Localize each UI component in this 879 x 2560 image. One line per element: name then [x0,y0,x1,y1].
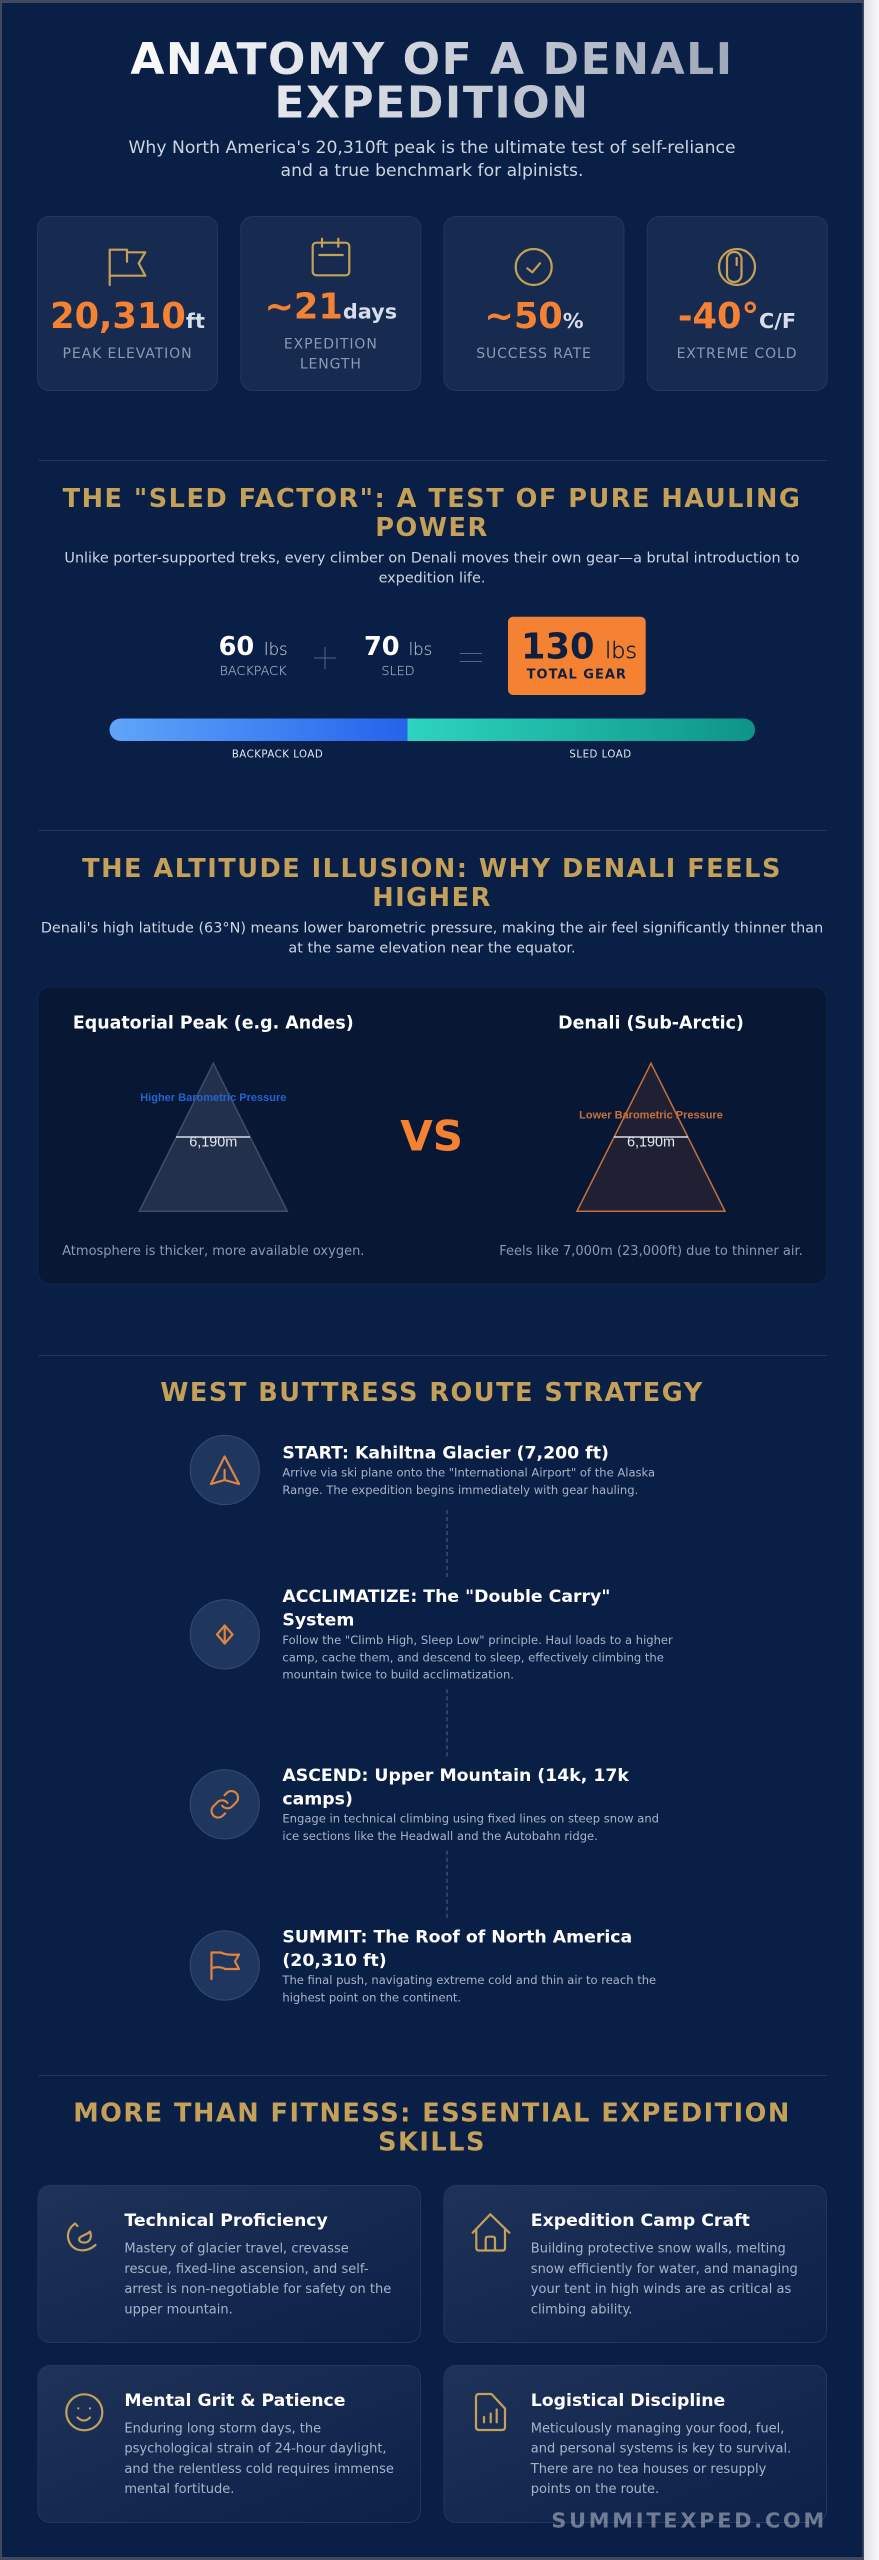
versus label: VS [400,1112,463,1161]
stat card: success rate [444,216,624,390]
subtitle: and a true benchmark for alpinists. [281,161,583,181]
stat card: expedition length: LENGTH [300,356,362,372]
heading: THE "SLED FACTOR": A TEST OF PURE HAULING [63,484,801,514]
step: summit: The final push, navigating extreme cold and thin air to reach the [281,1973,656,1987]
panel: key stats [38,216,827,390]
stat card: peak elevation [38,216,218,390]
skill card: logistical discipline: There are no tea houses or resupply [530,2462,767,2477]
step: ascend [190,1766,659,1843]
skill card: logistical discipline: Meticulously managing your food, fuel, [531,2422,784,2437]
step: acclimatize: System [282,1611,354,1631]
denali column: Feels like 7,000m (23,000ft) due to thinner air. [499,1244,803,1259]
skill card: logistical discipline: points on the route. [531,2482,659,2497]
skill card: logistical discipline [444,2366,826,2522]
sled weight: SLED [381,664,415,679]
skill card: mental grit: Mental Grit & Patience [124,2391,346,2411]
step: start: Arrive via ski plane onto the "International Airport" of the Alaska [282,1466,655,1480]
denali column: Denali (Sub-Arctic) [558,1013,744,1033]
stat card: success rate: ~50% [484,296,584,337]
stat card: expedition length: ~21days [264,286,397,327]
step: summit [190,1927,656,2004]
step: acclimatize: ACCLIMATIZE: The "Double Carry" [282,1587,610,1607]
total gear box: 130 [521,626,594,667]
backpack weight: 60 [219,632,254,662]
equals sign [460,654,482,662]
intro text: Unlike porter-supported treks, every climber on Denali moves their own gear—a brutal introduction to [64,551,800,567]
title: ANATOMY OF A DENALI [130,34,734,85]
intro text: at the same elevation near the equator. [288,941,576,957]
equatorial peak column: Atmosphere is thicker, more available oxygen. [62,1244,364,1259]
stat card: extreme cold: EXTREME COLD [677,346,797,362]
backpack weight: BACKPACK [220,664,287,679]
equatorial peak column: Higher Barometric Pressure [140,1092,286,1104]
skill card: expedition camp craft: Building protective snow walls, melting [531,2242,786,2257]
step: summit: (20,310 ft) [282,1951,387,1971]
step: ascend: camps) [282,1789,353,1809]
plus sign [314,647,336,669]
skill card: mental grit: Enduring long storm days, the [124,2422,321,2437]
connector [446,1510,448,1580]
total gear box: lbs [605,638,637,664]
heading: WEST BUTTRESS ROUTE STRATEGY [160,1378,704,1408]
stat card: extreme cold [647,216,827,390]
equatorial peak column: Equatorial Peak (e.g. Andes) [73,1013,354,1033]
subtitle: Why North America's 20,310ft peak is the ultimate test of self-reliance [128,138,736,158]
connector [446,1689,448,1759]
step: ascend: ASCEND: Upper Mountain (14k, 17k [282,1766,629,1786]
heading: THE ALTITUDE ILLUSION: WHY DENALI FEELS [82,854,782,884]
step: summit: SUMMIT: The Roof of North America [282,1927,632,1947]
stat card: success rate: SUCCESS RATE [476,346,592,362]
skill card: mental grit: and the relentless cold requires immense [124,2462,394,2477]
intro text: Denali's high latitude (63°N) means lower barometric pressure, making the air feel significantly thinner than [41,921,823,937]
skill card: technical proficiency: rescue, fixed-line ascension, and self- [124,2262,369,2277]
backpack weight: lbs [264,640,288,659]
step: summit: highest point on the continent. [282,1990,461,2004]
heading: MORE THAN FITNESS: ESSENTIAL EXPEDITION [73,2099,791,2129]
backpack weight [219,632,288,679]
header [128,34,736,181]
equatorial peak column: 6,190m [189,1135,237,1151]
step: ascend: ice sections like the Headwall and the Autobahn ridge. [282,1829,598,1843]
skill card: technical proficiency: Technical Proficiency [124,2211,328,2231]
step: acclimatize: mountain twice to build acclimatization. [282,1668,514,1682]
stat card: expedition length [241,216,421,390]
panel: altitude illusion [38,854,826,1284]
step: ascend: Engage in technical climbing using fixed lines on steep snow and [282,1812,659,1826]
sled weight: 70 [364,632,400,662]
connector [446,1851,448,1920]
skill card: expedition camp craft: Expedition Camp Craft [531,2211,750,2231]
sled weight: lbs [409,640,432,659]
heading: POWER [375,513,489,543]
load bar: BACKPACK LOAD [232,750,323,761]
load bar: SLED LOAD [569,750,632,761]
comparison panel [38,987,826,1284]
skill card: expedition camp craft: snow efficiently for water, and managing [531,2262,798,2277]
footer watermark: SUMMITEXPED.COM [551,2509,827,2533]
panel: route strategy [160,1378,704,2004]
denali column [499,1013,803,1259]
heading: HIGHER [372,883,492,913]
total gear box: TOTAL GEAR [527,667,627,682]
stat card: peak elevation: PEAK ELEVATION [63,346,192,362]
skill card: mental grit: psychological strain of 24-hour daylight, [124,2442,387,2457]
skill card: technical proficiency: arrest is non-negotiable for safety on the [124,2282,391,2297]
panel: essential skills [38,2099,826,2522]
heading: SKILLS [378,2128,486,2158]
sled weight [364,632,432,679]
skill card: expedition camp craft [444,2186,826,2342]
total gear box [508,617,646,695]
step: start: Range. The expedition begins immediately with gear hauling. [282,1483,638,1497]
step: acclimatize: Follow the "Climb High, Sleep Low" principle. Haul loads to a higher [282,1633,673,1647]
stat card: extreme cold: -40°C/F [678,296,796,337]
skill card: technical proficiency: upper mountain. [124,2302,233,2317]
skill card: mental grit [38,2366,420,2522]
skill card: technical proficiency: Mastery of glacier travel, crevasse [124,2242,349,2257]
skill card: expedition camp craft: your tent in high winds are as critical as [531,2282,791,2297]
stat card: expedition length: EXPEDITION [284,336,378,352]
intro text: expedition life. [379,571,485,587]
step: start [190,1435,655,1505]
step: start: START: Kahiltna Glacier (7,200 ft) [282,1443,609,1463]
equatorial peak column [62,1013,364,1259]
stat card: peak elevation: 20,310ft [50,296,205,337]
step: acclimatize [190,1587,673,1682]
skill card: logistical discipline: Logistical Discipline [531,2391,725,2411]
skill card: expedition camp craft: climbing ability. [531,2302,632,2317]
step: acclimatize: camp, cache them, and descend to sleep, effectively climbing the [282,1650,664,1664]
title: EXPEDITION [274,77,590,128]
denali column: 6,190m [627,1135,675,1151]
skill card: technical proficiency [38,2186,420,2342]
load bar [109,718,756,761]
skill card: logistical discipline: and personal systems is key to survival. [531,2442,791,2457]
panel: sled factor [63,484,801,761]
denali column: Lower Barometric Pressure [579,1109,723,1121]
skill card: mental grit: mental fortitude. [124,2482,234,2497]
